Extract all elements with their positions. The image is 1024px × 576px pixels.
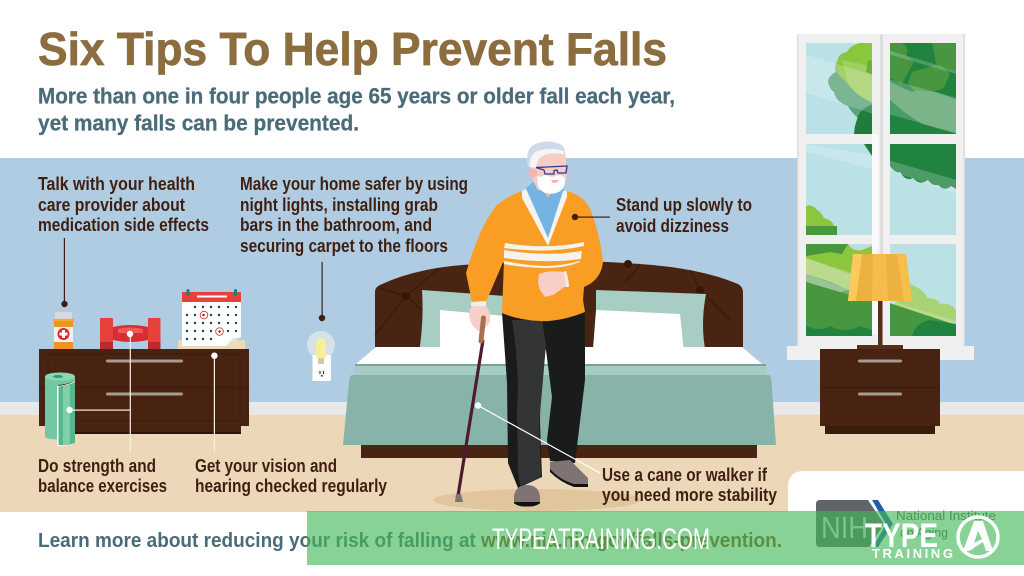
leader: strength exercises <box>66 331 133 452</box>
floor <box>0 415 1024 512</box>
NIH logo: NIH <box>821 510 868 545</box>
bottom left pane foliage <box>806 244 872 336</box>
tip: make home safer: bars in the bathroom, and <box>240 215 432 235</box>
icon: exercise mat <box>45 372 75 446</box>
leader: vision and hearing <box>211 352 218 452</box>
baseboard <box>0 402 1024 416</box>
lower and mid foliage <box>890 144 958 190</box>
tip: vision and hearing: hearing checked regularly <box>195 476 387 496</box>
watermark logo <box>865 517 998 561</box>
lamp <box>848 254 912 349</box>
man figure <box>455 141 603 507</box>
window sheen bands <box>800 50 960 326</box>
window <box>787 34 974 360</box>
leader: home safety <box>319 262 325 321</box>
bed <box>343 260 776 458</box>
leader: health care provider <box>61 238 68 307</box>
tip: vision and hearing: Get your vision and <box>195 456 337 476</box>
right shoe <box>550 460 588 487</box>
icon: calendar <box>178 289 245 349</box>
tip: strength and balance <box>38 456 167 496</box>
tip: strength and balance: balance exercises <box>38 476 167 496</box>
NIH logo: National Institute <box>896 508 996 523</box>
trousers <box>502 310 585 488</box>
hair <box>527 141 565 167</box>
tip: cane or walker: Use a cane or walker if <box>602 465 768 485</box>
window sill <box>787 346 974 360</box>
title: Six Tips To Help Prevent Falls <box>38 23 667 75</box>
tip: vision and hearing <box>195 456 387 496</box>
subtitle: More than one in four people age 65 years or older fall each year, <box>38 84 675 108</box>
tip: cane or walker <box>602 465 777 505</box>
tip: stand up slowly <box>616 195 752 236</box>
headboard <box>375 261 743 347</box>
tip: talk with provider: medication side effects <box>38 215 209 235</box>
head <box>530 150 567 192</box>
watermark A badge <box>958 517 998 557</box>
beard <box>537 175 565 194</box>
wall <box>0 158 1024 404</box>
right nightstand <box>820 349 940 434</box>
watermark text: TYPEATRAINING.COM <box>492 523 710 556</box>
left dresser <box>39 349 249 434</box>
pillows <box>419 290 505 353</box>
tree upper left <box>828 43 872 134</box>
tip: make home safer: Make your home safer by using <box>240 174 468 194</box>
leader: cane <box>475 402 600 473</box>
watermark logo: TYPE <box>865 517 938 555</box>
blanket <box>343 375 776 445</box>
tip: talk with provider: care provider about <box>38 195 185 215</box>
cuffs and hands <box>471 301 486 306</box>
watermark logo: TRAINING <box>872 546 953 561</box>
tip: make home safer <box>240 174 468 256</box>
tip: make home safer: securing carpet to the floors <box>240 236 448 256</box>
neck and shirt <box>532 172 563 200</box>
subtitle: yet many falls can be prevented. <box>38 110 359 136</box>
leader lines and dots <box>61 214 610 473</box>
subtitle <box>38 84 675 136</box>
tip: cane or walker: you need more stability <box>602 485 777 505</box>
collar <box>522 189 567 246</box>
tree upper right <box>888 43 958 134</box>
watermark band <box>307 511 1024 565</box>
sweater stripes <box>504 242 584 251</box>
glasses <box>536 166 567 174</box>
tip: strength and balance: Do strength and <box>38 456 156 476</box>
drawer handles <box>106 360 183 362</box>
tip: talk with provider: Talk with your health <box>38 174 195 194</box>
icon: pill bottle <box>53 312 74 349</box>
tip: stand up slowly: Stand up slowly to <box>616 195 752 215</box>
icon: night light <box>307 331 335 381</box>
sweater <box>466 191 603 321</box>
cane <box>458 340 483 496</box>
window panes and trees <box>800 40 960 340</box>
leader: stand up slowly <box>572 214 610 220</box>
NIH logo: on Aging <box>900 525 948 540</box>
tip: make home safer: night lights, installing grab <box>240 195 438 215</box>
left shoe <box>514 485 540 504</box>
footer text: Learn more about reducing your risk of falling at www.nia.nih.gov/falls-prevention. <box>38 530 782 552</box>
bottom right pane foliage <box>893 284 956 324</box>
mattress <box>356 347 762 368</box>
white logo corner <box>788 471 1024 512</box>
icon: dumbbell <box>100 318 160 349</box>
bed base <box>361 445 757 458</box>
tip: talk with provider <box>38 174 209 235</box>
NIH logo <box>816 500 996 547</box>
floor shadow <box>433 489 641 511</box>
tip: stand up slowly: avoid dizziness <box>616 216 729 236</box>
